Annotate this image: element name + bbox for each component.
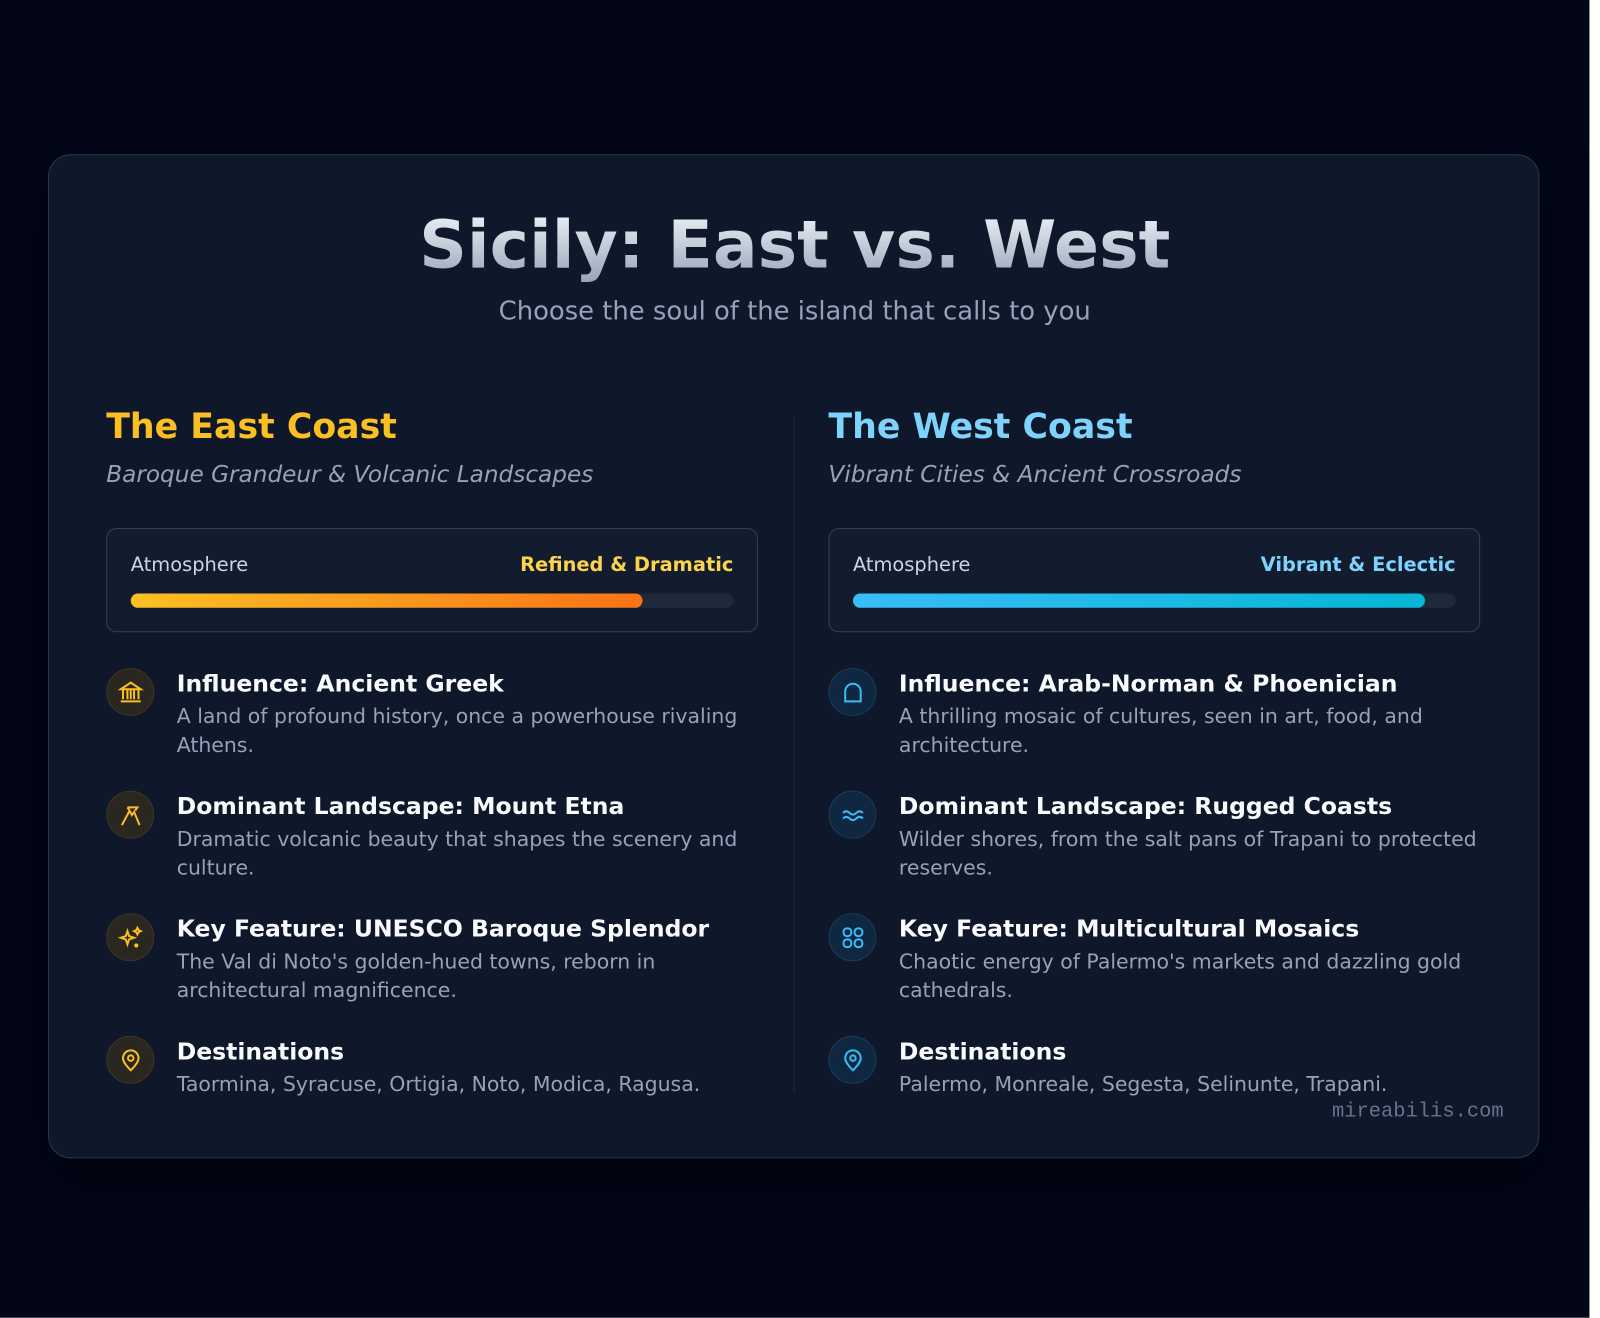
item: key feature east [106, 913, 710, 1002]
item: influence east: A land of profound history, once a powerhouse rivaling Athens. [177, 704, 737, 757]
item: destinations east: Taormina, Syracuse, Ortigia, Noto, Modica, Ragusa. [177, 1072, 700, 1096]
item: destinations west: Palermo, Monreale, Segesta, Selinunte, Trapani. [899, 1072, 1387, 1096]
atmosphere meter: east: Refined & Dramatic [520, 554, 733, 576]
item: influence east: Influence: Ancient Greek [177, 671, 504, 698]
watermark: mireabilis.com [1332, 1100, 1504, 1124]
item: landscape west: Wilder shores, from the salt pans of Trapani to protected reserves. [899, 826, 1477, 880]
card [48, 154, 1539, 1158]
atmosphere meter: west [828, 528, 1480, 632]
panel: west coast [828, 407, 1480, 1096]
item: influence east [106, 668, 737, 757]
item: influence west: Influence: Arab-Norman & Phoenician [899, 671, 1397, 698]
panel: east coast [106, 407, 758, 1096]
item: landscape east [106, 790, 737, 880]
item: key feature east: The Val di Noto's golden-hued towns, reborn in architectural magnificence. [177, 949, 655, 1002]
item: influence west: A thrilling mosaic of cultures, seen in art, food, and architecture. [899, 704, 1423, 757]
tagline: east: Baroque Grandeur & Volcanic Landscapes [106, 462, 593, 488]
atmosphere meter: east: Atmosphere [131, 554, 248, 576]
item: key feature east: Key Feature: UNESCO Baroque Splendor [177, 916, 709, 943]
title: Sicily: East vs. West [419, 207, 1170, 284]
atmosphere meter: west: Vibrant & Eclectic [1261, 554, 1456, 576]
subtitle: Choose the soul of the island that calls to you [499, 296, 1091, 326]
item: destinations west: Destinations [899, 1039, 1066, 1065]
title [0, 207, 1589, 284]
item: destinations west [828, 1036, 1387, 1096]
item: landscape east: Dominant Landscape: Mount Etna [177, 794, 624, 820]
item: key feature west: Chaotic energy of Palermo's markets and dazzling gold cathedrals. [899, 949, 1461, 1002]
atmosphere meter: west: Atmosphere [853, 554, 970, 576]
heading: west: The West Coast [828, 407, 1133, 447]
item: landscape west [828, 790, 1477, 880]
item: key feature west [828, 913, 1461, 1002]
heading: east: The East Coast [106, 407, 397, 447]
item: landscape west: Dominant Landscape: Rugged Coasts [899, 794, 1392, 820]
item: destinations east [106, 1036, 700, 1096]
item: influence west [828, 668, 1423, 757]
atmosphere meter: east [106, 528, 758, 632]
item: destinations east: Destinations [177, 1039, 344, 1065]
tagline: west: Vibrant Cities & Ancient Crossroads [828, 462, 1241, 488]
item: landscape east: Dramatic volcanic beauty that shapes the scenery and culture. [177, 826, 737, 880]
item: key feature west: Key Feature: Multicultural Mosaics [899, 916, 1359, 943]
